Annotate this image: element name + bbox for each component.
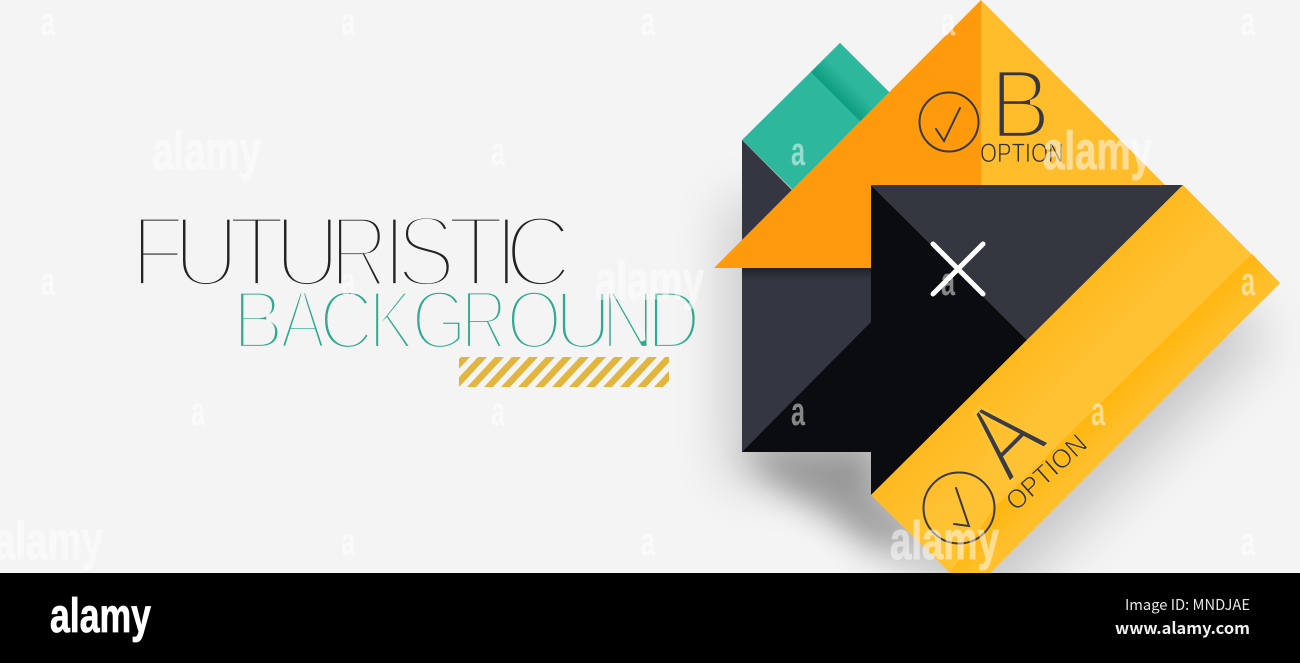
subtitle: BACKGROUND: O <box>506 274 562 367</box>
watermark pattern <box>41 0 1255 564</box>
watermark pattern: a <box>1091 390 1105 434</box>
watermark pattern: a <box>791 390 805 434</box>
hatched accent bar <box>459 357 669 387</box>
watermark pattern: a <box>341 260 355 304</box>
drop shadows <box>728 200 1270 628</box>
icon: A check circle <box>924 472 994 544</box>
subtitle: BACKGROUND: K <box>368 274 414 367</box>
footer url: www.alamy.com <box>1115 615 1250 639</box>
subtitle: BACKGROUND <box>232 273 701 367</box>
watermark pattern: a <box>491 130 505 174</box>
panel: yellow band option A <box>871 185 1280 593</box>
watermark pattern: a <box>1241 0 1255 44</box>
title: FUTURISTIC: T <box>228 194 286 308</box>
panel: dark centre top <box>871 185 1183 340</box>
footer image id: Image ID: MNDJAE <box>1125 594 1250 615</box>
subtitle: BACKGROUND: R <box>461 274 507 367</box>
watermark wordmarks: alamy <box>1043 121 1152 181</box>
letter A: A <box>940 373 1067 500</box>
panel: black centre <box>871 185 1027 495</box>
watermark wordmarks: alamy <box>890 511 999 571</box>
title: FUTURISTIC: U <box>274 194 341 308</box>
title: FUTURISTIC: R <box>330 194 389 308</box>
watermark pattern: a <box>341 0 355 44</box>
label: B option: OPTION <box>980 139 1064 169</box>
label: A option: OPTION <box>1000 428 1093 517</box>
icon: X close <box>933 244 983 294</box>
panel: orange triangle option B <box>714 0 1165 268</box>
letter B: B <box>990 50 1051 160</box>
title: FUTURISTIC: S <box>396 195 456 309</box>
subtitle: BACKGROUND: N <box>601 273 655 366</box>
footer logo: alamy <box>50 590 151 643</box>
watermark wordmarks <box>0 121 1152 571</box>
title: FUTURISTIC: I <box>382 194 407 308</box>
watermark pattern: a <box>941 0 955 44</box>
title: FUTURISTIC <box>131 194 572 309</box>
watermark wordmarks: alamy <box>595 251 704 311</box>
subtitle: BACKGROUND: G <box>411 274 467 367</box>
dark rectangle top band under orange <box>742 268 871 276</box>
title: FUTURISTIC: T <box>447 194 505 308</box>
title: FUTURISTIC: F <box>131 195 185 309</box>
watermark pattern: a <box>941 260 955 304</box>
subtitle: BACKGROUND: D <box>646 273 701 366</box>
footer bar <box>0 573 1300 663</box>
title: FUTURISTIC: C <box>504 194 572 308</box>
watermark pattern: a <box>41 260 55 304</box>
subtitle: BACKGROUND: B <box>232 274 284 367</box>
geometric shape group <box>714 0 1280 628</box>
watermark pattern: a <box>791 130 805 174</box>
watermark pattern: a <box>191 390 205 434</box>
subtitle: BACKGROUND: U <box>554 274 612 367</box>
watermark pattern: a <box>41 0 55 44</box>
watermark pattern: a <box>491 390 505 434</box>
title: FUTURISTIC: U <box>173 194 240 308</box>
black triangle lower left <box>742 322 871 452</box>
watermark wordmarks: alamy <box>152 121 261 181</box>
watermark pattern: a <box>641 0 655 44</box>
watermark pattern: a <box>1241 260 1255 304</box>
panel: teal square <box>742 43 895 192</box>
title: FUTURISTIC: I <box>494 194 519 308</box>
watermark pattern: a <box>341 520 355 564</box>
panel: dark rectangle <box>742 140 871 452</box>
watermark pattern: a <box>1241 520 1255 564</box>
watermark pattern: a <box>641 520 655 564</box>
subtitle: BACKGROUND: C <box>319 273 374 366</box>
icon: B check circle <box>920 92 978 152</box>
subtitle: BACKGROUND: A <box>280 274 326 367</box>
